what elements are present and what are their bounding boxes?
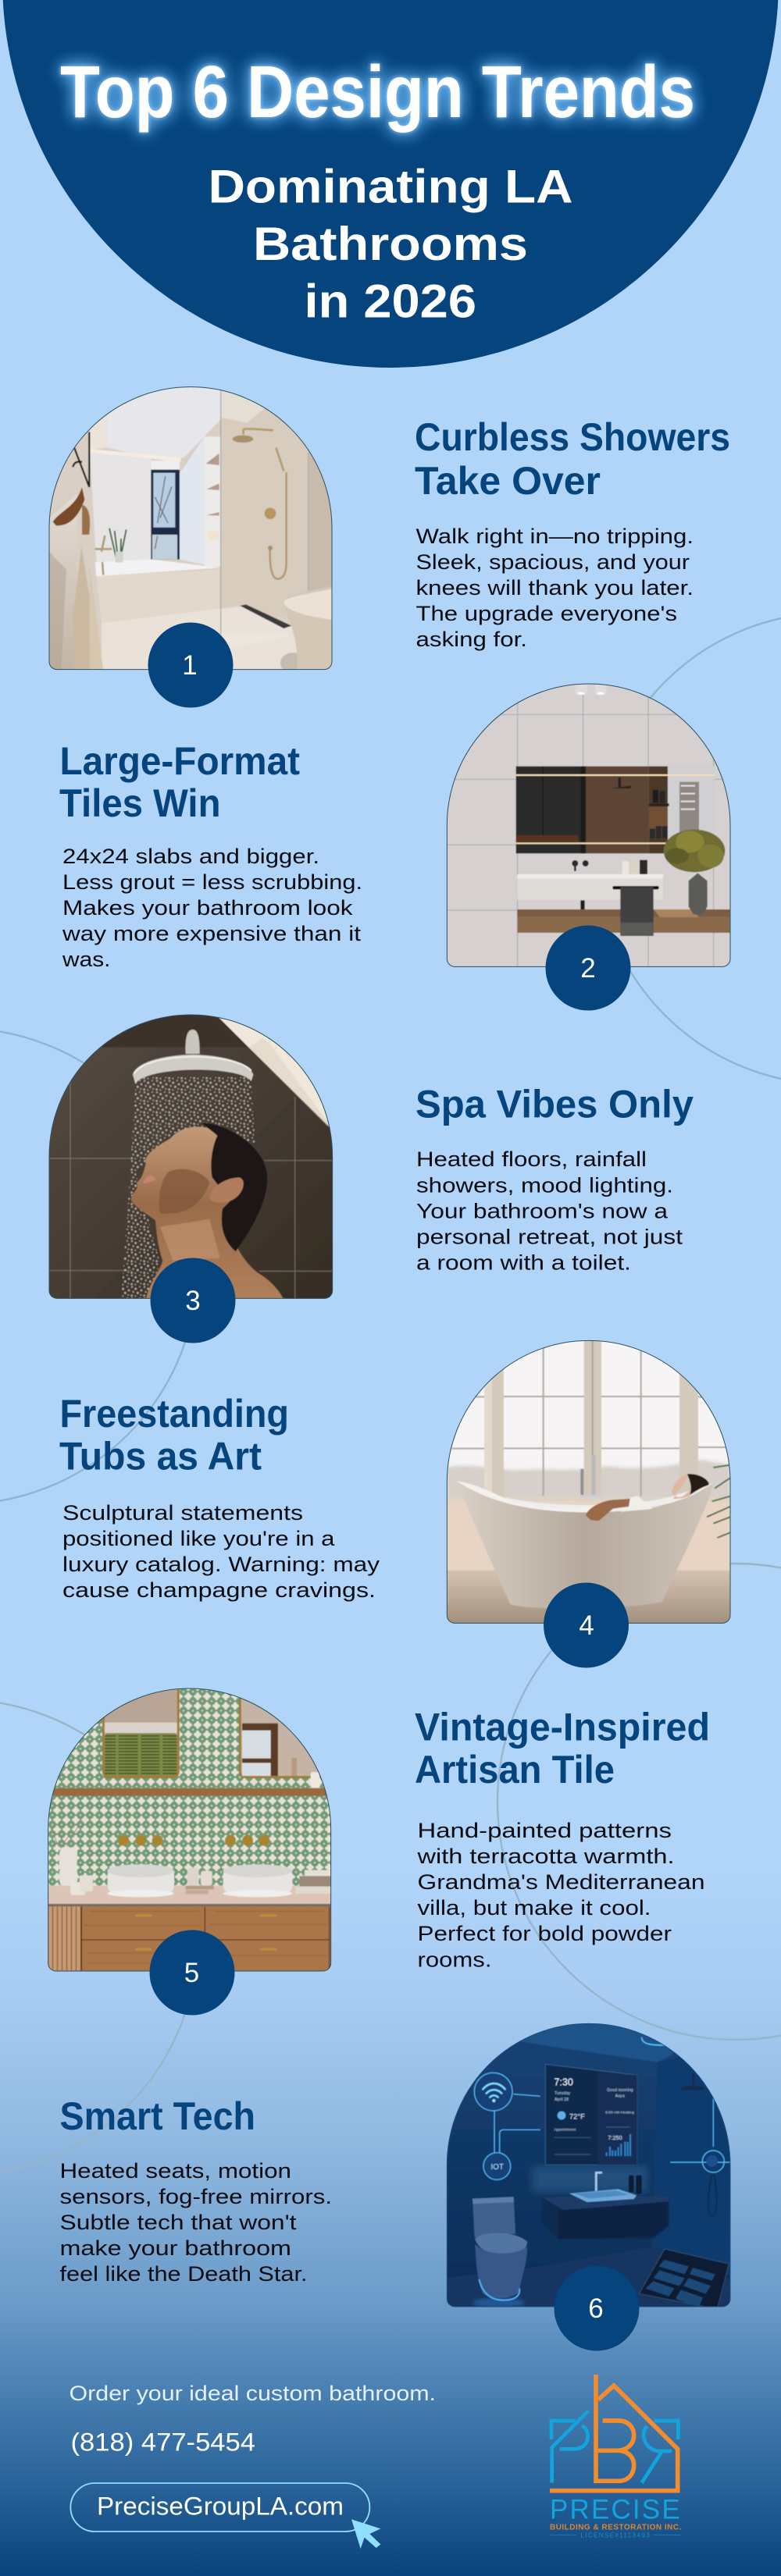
heading 6: Smart Tech bbox=[59, 2094, 255, 2138]
photo: woman in freestanding tub bbox=[441, 1335, 738, 1626]
panel: trend 1 curbless showers bbox=[43, 382, 730, 707]
call to action line: Order your ideal custom bathroom. bbox=[69, 2382, 436, 2405]
subtitle: Dominating LA bbox=[208, 161, 573, 212]
number badge 4 bbox=[544, 1583, 629, 1667]
body text 1: knees will thank you later. bbox=[415, 576, 694, 600]
photo: smart bathroom with glowing displays: April 28 bbox=[555, 2097, 569, 2102]
heading 2: Tiles Win bbox=[59, 781, 220, 825]
panel: trend 6 smart tech bbox=[59, 2018, 738, 2351]
heading 4: Tubs as Art bbox=[59, 1435, 262, 1478]
panel: trend 5 vintage artisan tile bbox=[43, 1682, 710, 2016]
photo: walk-in curbless shower bbox=[43, 382, 340, 679]
body text 6 bbox=[59, 2159, 332, 2286]
number badge 1 bbox=[148, 623, 233, 707]
body text 3: personal retreat, not just bbox=[416, 1226, 683, 1249]
number badge 4: 4 bbox=[579, 1610, 594, 1641]
subtitle: in 2026 bbox=[305, 275, 476, 328]
body text 6: Heated seats, motion bbox=[59, 2159, 291, 2183]
photo: smart bathroom with glowing displays: 72°F bbox=[569, 2112, 585, 2120]
heading 1 bbox=[415, 415, 730, 503]
number badge 2 bbox=[545, 926, 631, 1010]
body text 1 bbox=[415, 525, 694, 651]
decorative connector curves bbox=[0, 613, 781, 2176]
body text 6: Subtle tech that won't bbox=[59, 2211, 297, 2234]
body text 3: a room with a toilet. bbox=[416, 1251, 631, 1274]
body text 1: asking for. bbox=[415, 628, 527, 651]
photo: smart bathroom with glowing displays: Aaya bbox=[615, 2094, 625, 2099]
body text 5: Grandma's Mediterranean bbox=[417, 1870, 704, 1894]
heading 4: Freestanding bbox=[59, 1392, 289, 1436]
heading 5: Vintage-Inspired bbox=[415, 1705, 710, 1749]
logo: Precise Building and Restoration: LICENSE#1113493 bbox=[580, 2532, 650, 2539]
number badge 6: 6 bbox=[588, 2293, 604, 2324]
number badge 5: 5 bbox=[184, 1958, 199, 1988]
body text 2 bbox=[62, 845, 362, 971]
panel: trend 2 large-format tiles bbox=[59, 679, 738, 1010]
panel: trend 4 freestanding tubs bbox=[59, 1335, 738, 1667]
body text 5: villa, but make it cool. bbox=[417, 1896, 651, 1920]
heading 1: Take Over bbox=[415, 459, 601, 503]
main title: Top 6 Design Trends bbox=[60, 51, 695, 133]
photo: smart bathroom with glowing displays: 8:00 AM Heating bbox=[605, 2111, 634, 2115]
photo: man under rainfall shower bbox=[43, 1011, 340, 1308]
body text 1: Sleek, spacious, and your bbox=[415, 550, 690, 574]
photo: smart bathroom with glowing displays: 7:250 bbox=[608, 2134, 622, 2141]
body text 6: make your bathroom bbox=[59, 2236, 291, 2260]
body text 2: 24x24 slabs and bigger. bbox=[62, 845, 319, 868]
body text 4: positioned like you're in a bbox=[62, 1527, 336, 1550]
body text 4: Sculptural statements bbox=[62, 1501, 303, 1525]
heading 2 bbox=[59, 739, 300, 825]
body text 1: Walk right in—no tripping. bbox=[415, 525, 694, 548]
body text 6: feel like the Death Star. bbox=[59, 2262, 307, 2286]
phone number: (818) 477-5454 bbox=[70, 2428, 255, 2456]
body text 4: cause champagne cravings. bbox=[62, 1578, 376, 1602]
panel: trend 3 spa vibes bbox=[43, 1011, 694, 1343]
heading 3: Spa Vibes Only bbox=[415, 1082, 694, 1126]
body text 2: Makes your bathroom look bbox=[62, 896, 353, 920]
logo: Precise Building and Restoration bbox=[550, 2375, 682, 2539]
body text 1: The upgrade everyone's bbox=[415, 602, 677, 625]
photo: smart bathroom with glowing displays: Good morning bbox=[607, 2088, 633, 2093]
number badge 6 bbox=[555, 2265, 639, 2351]
subtitle: Bathrooms bbox=[253, 218, 528, 270]
body text 4: luxury catalog. Warning: may bbox=[62, 1553, 380, 1576]
body text 5: with terracotta warmth. bbox=[416, 1845, 675, 1868]
website button with cursor: PreciseGroupLA.com bbox=[97, 2492, 344, 2521]
body text 3 bbox=[416, 1147, 683, 1274]
icon: mouse cursor bbox=[351, 2519, 380, 2549]
heading 5 bbox=[415, 1705, 710, 1791]
body text 5 bbox=[416, 1819, 704, 1972]
photo: smart bathroom with glowing displays: 7:30 bbox=[554, 2077, 573, 2088]
body text 5: rooms. bbox=[417, 1948, 492, 1972]
subtitle bbox=[208, 161, 573, 328]
body text 4 bbox=[62, 1501, 380, 1602]
heading 4 bbox=[59, 1392, 289, 1478]
heading 5: Artisan Tile bbox=[415, 1748, 615, 1791]
photo: smart bathroom with glowing displays: Appointment bbox=[554, 2127, 576, 2132]
photo: smart bathroom with glowing displays: Tuesday bbox=[555, 2091, 571, 2096]
body text 3: Your bathroom's now a bbox=[416, 1199, 669, 1222]
heading 2: Large-Format bbox=[59, 739, 300, 783]
logo: Precise Building and Restoration: BUILDING & RESTORATION INC. bbox=[550, 2524, 682, 2532]
body text 5: Hand-painted patterns bbox=[417, 1819, 672, 1842]
number badge 5 bbox=[150, 1930, 234, 2016]
number badge 2: 2 bbox=[580, 953, 596, 984]
photo: smart bathroom with glowing displays bbox=[441, 2018, 738, 2314]
body text 3: Heated floors, rainfall bbox=[416, 1147, 647, 1171]
heading 1: Curbless Showers bbox=[415, 415, 730, 459]
photo: smart bathroom with glowing displays: IOT bbox=[490, 2163, 504, 2172]
body text 2: way more expensive than it bbox=[62, 922, 362, 945]
footer: call to action bbox=[69, 2375, 682, 2549]
number badge 3: 3 bbox=[185, 1286, 201, 1316]
body text 3: showers, mood lighting. bbox=[416, 1174, 673, 1197]
header dark circle bbox=[2, 0, 779, 368]
photo: large tile vanity wall bbox=[441, 679, 738, 976]
number badge 1: 1 bbox=[182, 650, 198, 681]
body text 5: Perfect for bold powder bbox=[417, 1922, 672, 1945]
logo: Precise Building and Restoration: PRECISE bbox=[550, 2495, 680, 2525]
body text 2: was. bbox=[62, 948, 111, 971]
body text 6: sensors, fog-free mirrors. bbox=[59, 2185, 332, 2208]
website button with cursor bbox=[70, 2483, 380, 2549]
number badge 3 bbox=[150, 1258, 236, 1343]
photo: green tile double vanity bbox=[43, 1682, 344, 1972]
header: title block bbox=[2, 0, 779, 368]
body text 2: Less grout = less scrubbing. bbox=[62, 870, 362, 894]
